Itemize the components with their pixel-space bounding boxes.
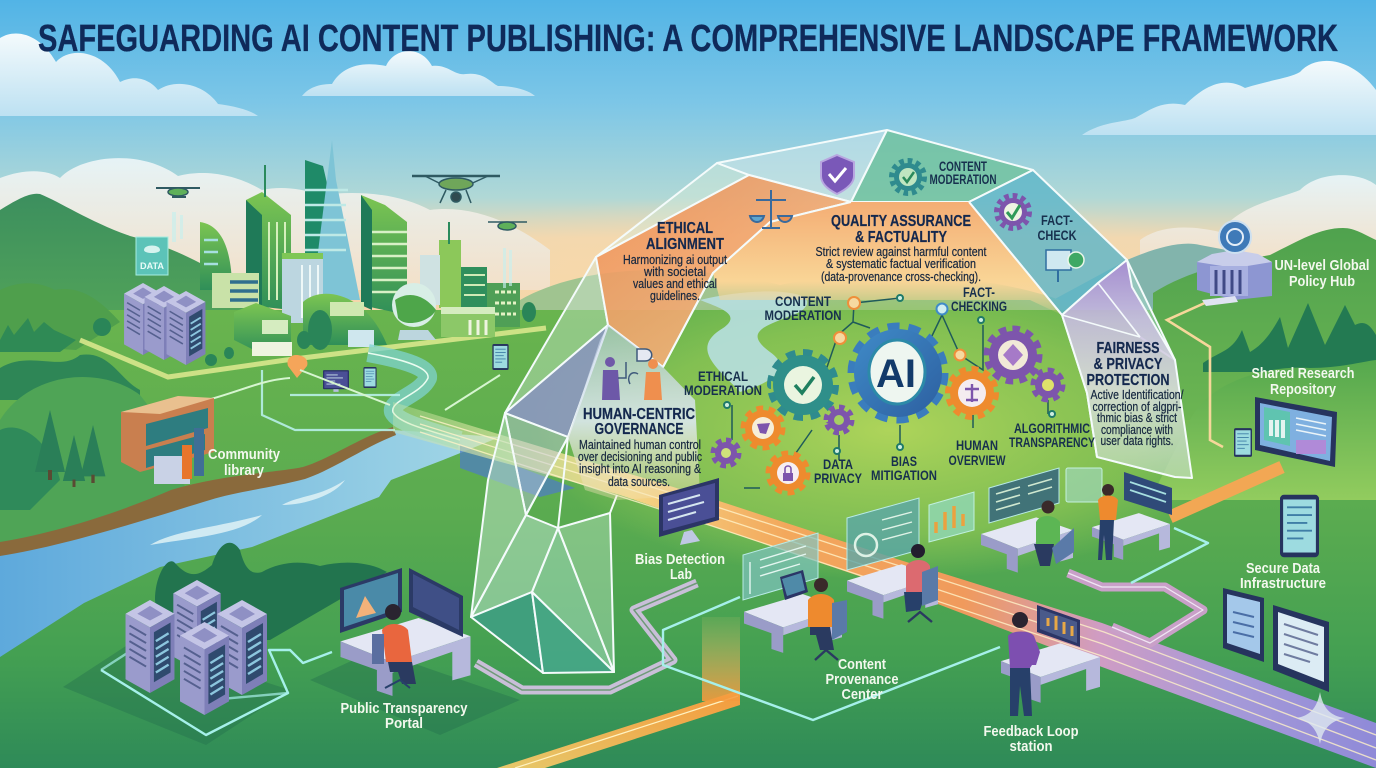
- label: community library: library: [224, 462, 265, 479]
- label: data privacy: DATA: [823, 456, 853, 472]
- label: fact-checking: [951, 284, 1007, 314]
- text: quality assurance description: (data-provenance cross-checking).: [821, 270, 981, 284]
- label: public transparency portal: Portal: [385, 715, 423, 732]
- label: UN-level global policy hub: [1274, 257, 1370, 290]
- device: repository tablet: [1234, 397, 1337, 467]
- label: bias detection lab: Bias Detection: [635, 551, 725, 568]
- left forest hills: [0, 283, 200, 560]
- mountain left: [0, 194, 270, 350]
- text: ethical alignment description: values and ethical: [633, 277, 717, 291]
- label: content provenance center: Provenance: [826, 671, 898, 688]
- gear: orange human overview: [948, 369, 996, 417]
- heading: fairness and privacy protection: & PRIVACY: [1094, 356, 1163, 373]
- text: quality assurance description: & systematic factual verification: [826, 257, 976, 271]
- label: content moderation: [764, 293, 842, 323]
- label: shared research repository: Repository: [1270, 381, 1337, 398]
- label: shared research repository: Shared Research: [1252, 365, 1354, 382]
- label: shared research repository: [1252, 365, 1354, 398]
- text: human-centric description: insight into AI reasoning &: [579, 462, 702, 476]
- label: top fact-check: CHECK: [1038, 227, 1076, 243]
- gear: teal check: [771, 353, 835, 417]
- trees left: [35, 410, 105, 487]
- arch inner edge: [663, 202, 1097, 457]
- heading: fairness and privacy protection: PROTECTION: [1086, 372, 1170, 389]
- label: secure data infrastructure: [1240, 560, 1326, 592]
- round city trees: [93, 302, 536, 366]
- orange path from policy hub: [1167, 302, 1223, 447]
- panel: human-centric: [568, 325, 700, 500]
- distant hills right: [1053, 244, 1290, 320]
- text: fairness description: Active Identification/: [1090, 388, 1184, 402]
- heading: quality assurance: QUALITY ASSURANCE: [831, 213, 971, 230]
- heading: ethical alignment: ETHICAL: [657, 220, 713, 237]
- label: content moderation: CONTENT: [775, 293, 831, 309]
- workstation: far right analyst: [1092, 472, 1172, 560]
- server cluster bottom left: [126, 580, 267, 715]
- building: UN-level global policy hub: [1197, 221, 1272, 306]
- heading: ethical alignment: ALIGNMENT: [646, 236, 724, 253]
- grey lilac path left: [476, 583, 697, 690]
- gear: orange lock: [768, 453, 808, 493]
- label: algorithmic transparency: [1009, 420, 1095, 450]
- heading: ethical alignment: [646, 220, 724, 253]
- workstation: public transparency portal: [340, 568, 470, 696]
- panel: fairness: [1062, 260, 1192, 478]
- workstation: feedback loop: [1001, 605, 1100, 716]
- workstation: content provenance: [743, 533, 847, 660]
- label: bias mitigation: BIAS: [891, 453, 917, 469]
- community library: [121, 396, 214, 484]
- label: ethical moderation: ETHICAL: [698, 368, 748, 384]
- text: ethical alignment description: guidelines.: [650, 289, 700, 303]
- DATA holographic panel: [136, 237, 168, 275]
- gear: small purple right: [1033, 370, 1063, 400]
- label: algorithmic transparency: TRANSPARENCY: [1009, 434, 1095, 450]
- dome left wall facets: [471, 257, 617, 673]
- heading: human-centric governance: HUMAN-CENTRIC: [583, 406, 695, 423]
- ground shadows bottom left: [63, 640, 520, 745]
- panel: ethical alignment: [596, 175, 851, 367]
- label: human overview: [948, 437, 1006, 468]
- drones: [156, 176, 527, 230]
- heading: human-centric governance: GOVERNANCE: [594, 421, 684, 438]
- distant hill middle: [520, 270, 1060, 360]
- label: ethical moderation: MODERATION: [684, 382, 762, 398]
- text: human-centric description: [578, 438, 702, 489]
- gear: small purple centre: [826, 407, 852, 433]
- icon: fact-check monitor: [1046, 250, 1084, 282]
- label: top content moderation: CONTENT: [939, 158, 987, 174]
- label: human overview: HUMAN: [956, 437, 998, 453]
- label: top fact-check: FACT-: [1041, 212, 1073, 228]
- heading: fairness and privacy protection: FAIRNESS: [1096, 340, 1160, 357]
- main data band: [393, 402, 1376, 768]
- gear: top fact-check: [997, 196, 1029, 228]
- label: community library: Community: [208, 446, 281, 463]
- label: fact-checking: CHECKING: [951, 298, 1007, 314]
- label: feedback loop station: [984, 723, 1078, 755]
- label: bias detection lab: [635, 551, 725, 583]
- label: public transparency portal: Public Transparency: [340, 700, 468, 717]
- text: quality assurance description: [816, 245, 987, 284]
- label: secure data infrastructure: Infrastructure: [1240, 575, 1326, 592]
- icon: scales of justice: [750, 190, 792, 228]
- text: fairness description: compliance with: [1101, 423, 1173, 437]
- bias detection monitor: [659, 478, 719, 545]
- text: ethical alignment description: with societal: [643, 265, 706, 279]
- city skyline: [200, 140, 520, 356]
- device: lower right tablets: [1223, 588, 1329, 692]
- gear: AI central: [852, 327, 944, 419]
- gear: AI central: AI: [876, 352, 916, 396]
- label: data privacy: PRIVACY: [814, 470, 863, 486]
- text: ethical alignment description: [623, 253, 727, 303]
- device: secure data tablet: [1280, 495, 1319, 557]
- dome top facets: [596, 130, 1175, 360]
- interior winding stream: [700, 291, 807, 392]
- dome interior meadow: [530, 280, 1250, 580]
- label: secure data infrastructure: Secure Data: [1246, 560, 1321, 577]
- gear: small purple left: [713, 440, 739, 466]
- clouds: mid row: [0, 158, 1376, 290]
- devices near city: [323, 344, 509, 392]
- label: content provenance center: Content: [838, 656, 886, 673]
- text: fairness description: thmic bias & strict: [1097, 411, 1177, 425]
- label: bias mitigation: [871, 453, 937, 483]
- data centre left: [124, 283, 205, 365]
- heading: quality assurance: & FACTUALITY: [855, 229, 947, 246]
- text: fairness description: [1090, 388, 1184, 448]
- label: fact-checking: FACT-: [963, 284, 995, 300]
- heading: human-centric governance: [583, 406, 695, 438]
- cyan circuit outlines: [101, 528, 1208, 735]
- icon: shield: [821, 155, 854, 194]
- label: community library: [208, 446, 281, 479]
- gear: purple transparency: [987, 329, 1039, 381]
- label: ethical moderation: [684, 368, 762, 398]
- label: human overview: OVERVIEW: [948, 452, 1006, 468]
- label: feedback loop station: Feedback Loop: [984, 723, 1078, 740]
- label: UN-level global policy hub: Policy Hub: [1289, 273, 1355, 290]
- label: top content moderation: MODERATION: [930, 171, 996, 187]
- ground: [0, 310, 1376, 768]
- connector nodes: [724, 295, 1055, 454]
- panel: quality assurance: [713, 202, 1062, 315]
- orange beam lower centre: [497, 617, 740, 768]
- drone light beams: [172, 212, 512, 288]
- heading: quality assurance: [831, 213, 971, 246]
- gear: orange ethical: [743, 408, 783, 448]
- sunset glow: [330, 195, 1270, 335]
- text: quality assurance description: Strict review against harmful content: [816, 245, 987, 259]
- label: content provenance center: Center: [842, 686, 883, 703]
- background: sky: [0, 0, 1376, 340]
- river: [0, 427, 500, 657]
- bridge shadow: [460, 445, 575, 497]
- bottom left tree line: [155, 543, 387, 640]
- text: human-centric description: data sources.: [608, 475, 670, 489]
- right hills and forest: [1150, 228, 1376, 500]
- workstation: middle analysts: [847, 492, 974, 622]
- label: top fact-check: [1038, 212, 1076, 243]
- connector lines: [732, 298, 1048, 488]
- location pin: [287, 355, 307, 378]
- pink loop path: [1068, 573, 1203, 643]
- upper right orange road: [1170, 467, 1282, 517]
- text: ethical alignment description: Harmonizing ai output: [623, 253, 727, 267]
- text: fairness description: correction of algpri-: [1092, 400, 1182, 414]
- heading: fairness and privacy protection: [1086, 340, 1170, 389]
- label: public transparency portal: [340, 700, 468, 732]
- text: human-centric description: Maintained human control: [579, 438, 701, 452]
- city pale road: [80, 328, 546, 377]
- icon: people and circuit: [602, 349, 662, 400]
- DATA holographic panel: DATA: [140, 261, 164, 271]
- glowing teal roads: [200, 353, 500, 440]
- sparkle: [1296, 692, 1345, 744]
- label: algorithmic transparency: ALGORITHMIC: [1014, 420, 1090, 436]
- label: top content moderation: [930, 158, 996, 187]
- label: data privacy: [814, 456, 863, 486]
- label: feedback loop station: station: [1010, 738, 1052, 755]
- label: bias mitigation: MITIGATION: [871, 467, 937, 483]
- gear: top content moderation: [892, 161, 924, 193]
- label: content provenance center: [826, 656, 898, 703]
- text: human-centric description: over decisioning and public: [578, 450, 702, 464]
- clouds: upper row: [0, 33, 1376, 135]
- dome structure: [471, 130, 1192, 673]
- globe: [392, 283, 436, 340]
- label: bias detection lab: Lab: [670, 566, 692, 583]
- label: content moderation: MODERATION: [764, 307, 842, 323]
- workstation: right analysts: [981, 468, 1102, 573]
- text: fairness description: user data rights.: [1100, 434, 1174, 448]
